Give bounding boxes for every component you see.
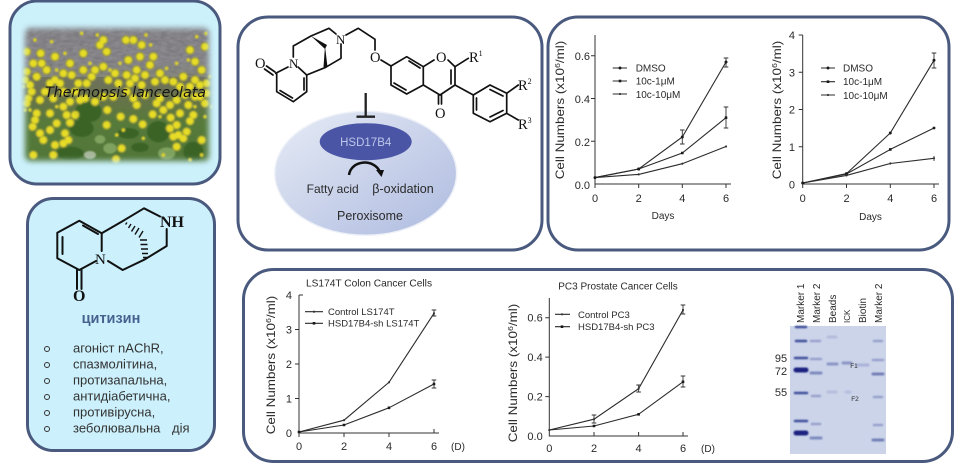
chart: PC3: 0.4 (527, 352, 543, 364)
chart: PC3: 2 (591, 443, 597, 455)
activity list: зеболювальна (73, 420, 160, 436)
chart: 10c right: Days (859, 212, 882, 223)
panel: plant photo (10, 1, 220, 184)
chart: 10c left: 6 (723, 193, 729, 205)
chart: PC3: 0 (546, 443, 552, 455)
derivative structure: O (436, 50, 446, 66)
activity list: агоніст nAChR, (73, 340, 164, 356)
panel: 10c growth curves (548, 17, 949, 250)
chart: 10c right: Cell Numbers (x10 (771, 68, 784, 179)
chart: 10c right: 3 (789, 68, 795, 80)
cytisine structure: NH (160, 214, 185, 231)
chart: LS174T: 0 (296, 441, 302, 453)
activity list: антидіабетична, (73, 388, 170, 404)
panel: derivative and HSD17B4 mechanism (238, 17, 542, 250)
chart: PC3: /ml) (507, 304, 520, 326)
chart: 10c right: 2 (789, 104, 795, 116)
chart: PC3: Cell Numbers (x10 (507, 331, 520, 442)
gel lane labels: ICK (843, 309, 852, 323)
gel lane labels (796, 283, 885, 323)
reaction arrow (349, 163, 380, 175)
chart: LS174T: LS174T Colon Cancer Cells (306, 278, 432, 290)
molecular weight labels (775, 353, 787, 399)
molecular weight labels: 95 (775, 353, 787, 365)
derivative structure: R (518, 78, 528, 94)
derivative structure: 3 (528, 116, 532, 125)
chart: 10c left: 0.4 (575, 94, 590, 106)
derivative structure (255, 28, 532, 133)
chart: 10c right: 10c-10μM (843, 91, 888, 102)
panel: cytisine (28, 198, 214, 450)
chart: LS174T: 3 (286, 324, 292, 336)
chart: PC3: Control PC3 (578, 310, 630, 321)
photo caption: Thermopsis lanceolata (45, 85, 206, 101)
chart: 10c left: 10c-1μM (636, 76, 675, 88)
chart: 10c right: 1 (789, 142, 795, 154)
peroxisome diagram (275, 93, 457, 235)
derivative structure: R (469, 50, 479, 66)
activity list: противірусна, (73, 404, 155, 420)
chart: 10c left: Days (652, 211, 674, 222)
panel: knockdown curves and gel (244, 270, 952, 462)
activity list: спазмолітина, (73, 356, 157, 372)
chart: 10c right: 4 (789, 30, 795, 42)
chart: PC3: 0.2 (527, 392, 543, 404)
chart: PC3: 0.6 (527, 312, 543, 324)
derivative structure: N (336, 32, 346, 47)
chart: LS174T: 6 (265, 318, 273, 323)
chart: 10c right: 2 (843, 193, 850, 205)
chart: LS174T: /ml) (265, 296, 278, 318)
chart: LS174T: 4 (386, 441, 392, 453)
chart: 10c right: 6 (771, 63, 779, 68)
chart: 10c right: 0 (800, 193, 806, 205)
gel lane labels: Marker 1 (796, 283, 807, 323)
chart: LS174T: 4 (286, 290, 292, 302)
gel lane labels: Marker 2 (812, 283, 823, 323)
chart: LS174T: Control LS174T (328, 307, 395, 318)
chart: 10c left: 2 (636, 193, 642, 205)
peroxisome diagram: HSD17B4 (340, 137, 392, 149)
gel lane labels: Marker 2 (874, 283, 885, 323)
derivative structure: O (435, 106, 445, 122)
chart: LS174T: 6 (431, 441, 437, 453)
chart: LS174T: 2 (341, 441, 347, 453)
chart: 10c left (554, 35, 731, 222)
cytisine structure: N (95, 252, 106, 268)
chart: 10c left: 6 (554, 63, 562, 68)
chart: PC3: 4 (636, 443, 642, 455)
peroxisome diagram: Peroxisome (337, 209, 403, 223)
chart: LS174T: 2 (286, 359, 292, 371)
derivative structure: 1 (479, 49, 483, 58)
chart: 10c left: 0.6 (575, 51, 590, 63)
chart: 10c left: Cell Numbers (x10 (554, 68, 567, 179)
chart: 10c left: /ml) (554, 41, 567, 63)
peroxisome diagram: Fatty acid (307, 182, 359, 196)
derivative structure: R (518, 117, 528, 133)
photo: Thermopsis lanceolata flowers (20, 20, 215, 168)
chart: LS174T: HSD17B4-sh LS174T (328, 318, 420, 330)
gel image: F2 (851, 396, 859, 403)
chart: PC3: PC3 Prostate Cancer Cells (558, 282, 678, 292)
chart: 10c right: 6 (931, 193, 937, 205)
derivative structure: 2 (528, 77, 532, 86)
inhibition symbol (356, 93, 375, 117)
molecular weight labels: 55 (775, 387, 787, 399)
molecular weight labels: 72 (775, 366, 787, 378)
gel image: F1 (850, 363, 858, 370)
chart: PC3: 0.0 (527, 431, 543, 443)
derivative structure: O (370, 50, 380, 66)
chart: 10c right: 10c-1μM (843, 77, 882, 88)
activity list: дія (172, 420, 190, 436)
chart: 10c right: 0 (789, 180, 795, 192)
gel lane labels: Biotin (858, 298, 869, 323)
activity list: протизапальна, (73, 372, 167, 388)
chart: PC3: 6 (507, 326, 515, 331)
derivative structure: N (289, 56, 299, 71)
chart: 10c right (771, 30, 939, 223)
chart: LS174T: (D) (451, 442, 465, 453)
peroxisome diagram: β-oxidation (372, 182, 434, 196)
chart: 10c left: 0.0 (575, 180, 590, 192)
activity list (44, 340, 190, 436)
chart: LS174T: 1 (286, 394, 292, 406)
chart: 10c left: 0 (592, 193, 598, 205)
chart: 10c left: 0.2 (575, 137, 590, 149)
chart: LS174T: 0 (286, 428, 292, 440)
chart: 10c left: 10c-10μM (636, 90, 680, 101)
chart: 10c right: /ml) (771, 41, 784, 63)
chart: 10c right: DMSO (843, 64, 873, 74)
chart: LS174T (265, 278, 465, 453)
HSD17B4 ellipse (320, 123, 412, 160)
gel image (790, 326, 886, 454)
chart: PC3: 6 (680, 443, 686, 455)
chart: PC3: HSD17B4-sh PC3 (578, 322, 655, 333)
chart: LS174T: Cell Numbers (x10 (265, 323, 278, 434)
chart: PC3: (D) (701, 444, 715, 455)
cytisine structure: O (73, 288, 85, 305)
chart: 10c left: DMSO (636, 64, 666, 74)
chart: 10c left: 4 (679, 193, 685, 205)
chart: PC3 (507, 282, 715, 455)
derivative structure: O (255, 56, 265, 72)
cytisine structure (57, 208, 185, 305)
compound name: цитизин (82, 311, 140, 327)
gel lane labels: Beads (828, 295, 839, 323)
chart: 10c right: 4 (887, 193, 893, 205)
